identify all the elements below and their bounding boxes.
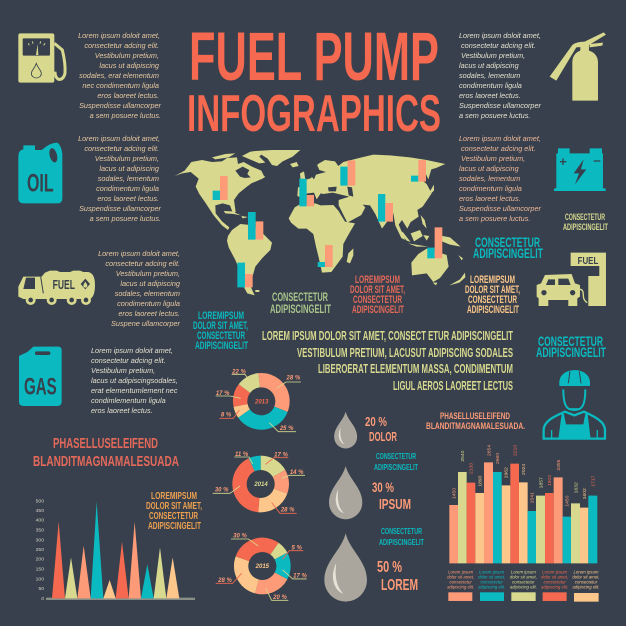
text block: gas: eros laoreet lectus. xyxy=(91,406,153,415)
percent labels: 28 % xyxy=(217,578,232,584)
percent labels: 20 % xyxy=(272,595,287,601)
text block: pump: Lorem ipsum doloit amet, xyxy=(78,31,160,40)
drop captions: CONSECTETUR xyxy=(376,451,416,461)
percent labels: 5 % xyxy=(292,545,302,551)
icon: worker xyxy=(544,370,605,439)
bar values: 1890 xyxy=(477,475,483,487)
label: red map caption: DOLOR SIT AMET, xyxy=(350,284,405,296)
inland seas xyxy=(303,165,353,203)
percent labels: 14 % xyxy=(290,470,304,476)
donut charts xyxy=(213,370,307,601)
icon: gas can: GAS xyxy=(24,373,57,400)
label: teal caption left xyxy=(193,310,248,352)
label: phasellus right: PHASELLUSELEIFEND xyxy=(440,411,510,422)
axis labels: 500 xyxy=(36,498,44,504)
legend text: adipiscing elit. xyxy=(572,584,600,589)
fuel drops xyxy=(324,412,367,602)
drop labels: LOREM xyxy=(381,577,418,594)
drop 20 xyxy=(334,412,357,448)
bar values: 1541 xyxy=(530,492,536,503)
title: INFOGRAPHICS xyxy=(187,85,441,143)
text block: truck: Lorem ipsum doloit amet, xyxy=(98,249,180,258)
drop captions xyxy=(374,451,425,547)
legend text: consectetur xyxy=(543,579,566,584)
legend swatches xyxy=(448,592,599,602)
drop labels: 20 % xyxy=(365,415,387,429)
legend text: dolor sit amet, xyxy=(447,574,474,579)
text block: gas: consectetur adcing elit. xyxy=(91,356,166,365)
drop labels: IPSUM xyxy=(379,496,411,513)
bar values: 2660 xyxy=(495,453,501,464)
text block: truck: lacus ut adipiscing xyxy=(120,279,180,288)
text block: extinguisher: condimentum ligula xyxy=(459,81,522,90)
drop captions: ADIPISCINGELIT xyxy=(374,462,419,472)
drop labels: 50 % xyxy=(377,559,402,576)
label: orange chart caption xyxy=(146,490,202,532)
bar values: 2130 xyxy=(469,463,475,474)
text block: oil: Lorem ipsum doloit amet, xyxy=(78,134,160,143)
bar values: 2355 xyxy=(556,459,562,471)
drop 30 xyxy=(329,466,362,519)
label: teal caption left: CONSECTETUR xyxy=(197,330,245,342)
legend text: adipiscing elit. xyxy=(541,584,568,589)
text block: oil: lacus ut adipiscing xyxy=(99,164,159,173)
label: phasellus left xyxy=(33,435,179,470)
percent labels: 22 % xyxy=(231,370,246,376)
text block: extinguisher: Lorem ipsum doloit amet, xyxy=(459,31,541,40)
text block: pump: Suspendisse ullamcorper xyxy=(79,101,162,110)
label: red map caption: ADIPISCINGELIT xyxy=(352,304,404,316)
bar values: 2654 xyxy=(486,445,492,456)
label: peach map caption: DOLOR SIT AMET, xyxy=(465,284,520,296)
text block: pump: consectetur adcing elit. xyxy=(84,41,159,50)
text block: gas: Vestibulum pretium, xyxy=(91,366,155,375)
text block: oil: consectetur adcing elit. xyxy=(84,144,159,153)
bar values: 2540 xyxy=(460,450,466,462)
label: teal caption upper right xyxy=(473,235,543,261)
text block: oil: condimentum ligula xyxy=(96,184,159,193)
legend text: adipiscing elit. xyxy=(478,584,505,589)
text block: truck: eros laoreet lectus. xyxy=(118,309,180,318)
label: teal caption upper right: CONSECTETUR xyxy=(475,235,540,250)
percent labels: 30 % xyxy=(215,487,229,493)
percent labels xyxy=(215,370,307,601)
text block: extinguisher: consectetur adcing elit. xyxy=(461,41,536,50)
legend text: Lorem ipsum xyxy=(448,569,474,574)
legend text: consectetur xyxy=(449,579,472,584)
americas xyxy=(175,150,300,295)
text block: pump xyxy=(78,31,162,120)
text block: pump: nec condimentum ligula xyxy=(82,81,159,90)
text block: battery: Vestibulum pretium, xyxy=(461,154,525,163)
text block: battery: consectetur adcing elit. xyxy=(461,144,536,153)
axis labels: 100 xyxy=(36,576,44,582)
text block: gas: Lorem ipsum doloit amet, xyxy=(91,346,173,355)
peak chart xyxy=(36,498,195,602)
drop captions: CONSECTETUR xyxy=(381,526,422,536)
bar values: 1717 xyxy=(591,475,597,487)
text block: pump: Vestibulum pretium, xyxy=(95,51,159,60)
legend text: Lorem ipsum xyxy=(479,569,505,574)
legend text: adipiscing elit. xyxy=(447,584,474,589)
legend text: dolor sit amet, xyxy=(510,574,537,579)
axis labels: 200 xyxy=(36,557,44,563)
percent labels: 30 % xyxy=(233,533,247,539)
text block: truck: consectetur adcing elit. xyxy=(105,259,180,268)
icon: oil can: OIL xyxy=(27,170,54,198)
year labels: 2015 xyxy=(255,564,270,570)
label: phasellus left: BLANDITMAGNAMALESUADA xyxy=(33,453,179,470)
drop labels: 30 % xyxy=(372,479,394,495)
text block: oil: a sem posuere luctus. xyxy=(90,214,161,223)
hudson bay xyxy=(235,167,251,178)
legend text: consectetur xyxy=(575,579,598,584)
label: teal caption above worker xyxy=(536,333,606,360)
bar chart xyxy=(447,445,600,602)
text block: oil xyxy=(78,134,162,223)
label: peach map caption xyxy=(465,274,520,316)
label: phasellus left: PHASELLUSELEIFEND xyxy=(53,435,158,452)
legend text: Lorem ipsum xyxy=(573,569,599,574)
icon: fuel truck: FUEL xyxy=(53,277,75,292)
axis labels: 350 xyxy=(36,528,44,534)
central text lines xyxy=(262,329,513,393)
label: red map caption: LOREMIPSUM xyxy=(355,274,400,286)
label: teal caption left: ADIPISCINGELIT xyxy=(195,340,248,352)
bar values: 1602 xyxy=(582,488,588,499)
axis labels: 300 xyxy=(36,537,44,543)
legend text: Lorem ipsum xyxy=(542,569,568,574)
text block: battery: sodales, lementum xyxy=(459,174,520,183)
text block: extinguisher: eros laoreet lectus. xyxy=(459,91,521,100)
bar values: 1857 xyxy=(538,477,544,488)
label: orange chart caption: CONSECTETUR xyxy=(149,510,198,522)
text block: extinguisher: a sem posuere luctus. xyxy=(459,111,530,120)
legend text: dolor sit amet, xyxy=(541,574,568,579)
text block: truck xyxy=(98,249,181,328)
legend text: Lorem ipsum xyxy=(511,569,536,574)
title: FUEL PUMP xyxy=(189,18,439,95)
label: red map caption: CONSECTETUR xyxy=(353,294,402,306)
map bars xyxy=(213,160,442,287)
label: peach map caption: LOREMIPSUM xyxy=(470,274,515,286)
text block: gas xyxy=(91,346,178,415)
axis labels: 0 xyxy=(41,596,44,602)
text block: truck: sodales, elementum xyxy=(115,289,180,298)
text block: gas: lacus ut adipiscingsodales, xyxy=(91,376,178,385)
percent labels: 17 % xyxy=(274,453,288,459)
bar values: 1962 xyxy=(504,467,510,478)
label: phasellus right xyxy=(426,411,525,432)
label: peach map caption: ADIPISCINGELIT xyxy=(467,304,519,316)
text block: oil: Vestibulum pretium, xyxy=(95,154,159,163)
axis labels: 150 xyxy=(36,566,44,572)
drop 50 xyxy=(324,533,367,602)
text block: extinguisher xyxy=(459,31,541,120)
bars xyxy=(449,462,597,563)
icon: gas can xyxy=(19,347,62,406)
text block: pump: a sem posuere luctus. xyxy=(90,111,161,120)
percent labels: 17 % xyxy=(216,391,230,397)
text block: truck: Suspene ullamcorper xyxy=(111,319,181,328)
year labels xyxy=(253,399,270,570)
bar values: 1902 xyxy=(547,475,553,486)
text block: extinguisher: Suspendisse ullamcorper xyxy=(459,101,541,110)
text block: battery: Suspendisse ullamcorper xyxy=(459,204,541,213)
year labels: 2013 xyxy=(254,399,269,405)
text block: pump: eros laoreet lectus. xyxy=(97,91,159,100)
legend text: consectetur xyxy=(480,579,503,584)
bar values: 1632 xyxy=(573,482,579,493)
percent labels: 17 % xyxy=(293,574,307,580)
text block: extinguisher: sodales, lementum xyxy=(459,71,520,80)
label: orange chart caption: DOLOR SIT AMET, xyxy=(146,500,202,512)
donut 2014 xyxy=(232,455,290,513)
central text lines: LIBEROERAT ELEMENTUM MASSA, CONDIMENTUM xyxy=(318,362,513,376)
bar values: 1450 xyxy=(451,488,457,499)
legend text: adipiscing elit. xyxy=(510,584,537,589)
label: green map caption: ADIPISCINGELIT xyxy=(270,304,331,316)
donut 2015 xyxy=(233,537,292,595)
legend text xyxy=(447,569,600,589)
icon: fire extinguisher xyxy=(550,32,606,101)
percent labels: 25 % xyxy=(279,426,294,432)
bar values: 2024 xyxy=(521,464,527,475)
text block: battery: lacus ut adipiscing xyxy=(459,164,519,173)
label: teal caption left: LOREMIPSUM xyxy=(198,310,244,322)
text block: truck: Vestibulum pretium, xyxy=(116,269,180,278)
label: green map caption xyxy=(270,292,331,316)
icon: car at fuel pump: FUEL xyxy=(578,256,598,267)
axis labels xyxy=(36,498,44,602)
axis labels: 250 xyxy=(36,547,44,553)
label: orange chart caption: LOREMIPSUM xyxy=(151,490,197,502)
label: green map caption: CONSECTETUR xyxy=(272,292,328,304)
icon: oil can xyxy=(18,143,62,203)
legend text: dolor sit amet, xyxy=(478,574,505,579)
central text lines: LIGUL AEROS LAOREET LECTUS xyxy=(393,379,513,393)
drop labels: DOLOR xyxy=(369,430,397,444)
text block: pump: lacus ut adipiscing xyxy=(99,61,159,70)
percent labels: 28 % xyxy=(286,376,301,382)
text block: oil: eros laoreet lectus. xyxy=(97,194,159,203)
label: teal caption upper right: ADIPISCINGELIT xyxy=(473,246,543,261)
label: red map caption xyxy=(350,274,405,316)
label: peach map caption: CONSECTETUR xyxy=(468,294,517,306)
text block: battery: condimentum ligula xyxy=(459,184,522,193)
icon: fuel truck xyxy=(18,271,95,305)
text block: battery: Lorem ipsum doloit amet, xyxy=(459,134,541,143)
drop labels xyxy=(365,415,418,594)
text block: oil: Suspendisse ullamcorper xyxy=(79,204,162,213)
year labels: 2014 xyxy=(253,482,268,488)
old world xyxy=(289,155,465,285)
bar values xyxy=(451,445,597,507)
title xyxy=(187,18,441,143)
percent labels: 11 % xyxy=(235,452,249,458)
label: orange chart caption: ADIPISCINGELIT xyxy=(148,520,201,532)
text block: gas: erat elementumlement nec xyxy=(91,386,178,395)
legend text: consectetur xyxy=(512,579,535,584)
text block: truck: condimentum ligula xyxy=(117,299,180,308)
text block: extinguisher: Vestibulum pretium, xyxy=(461,51,525,60)
percent labels: 28 % xyxy=(280,508,295,514)
icon: battery xyxy=(554,148,606,191)
drop captions: ADIPISCINGELIT xyxy=(379,537,425,547)
icon: car at fuel pump xyxy=(537,253,606,306)
percent labels: 8 % xyxy=(221,413,232,419)
text block: battery: a sem posuere luctus. xyxy=(459,214,530,223)
text block: extinguisher: lacus ut adipiscing xyxy=(459,61,519,70)
text block: pump: sodales, erat elementum xyxy=(79,71,159,80)
icon: fuel pump xyxy=(18,33,65,83)
axis labels: 50 xyxy=(38,586,44,592)
leader lines xyxy=(213,374,307,600)
bar values: 1450 xyxy=(565,495,571,507)
label: phasellus right: BLANDITMAGNAMALESUADA. xyxy=(426,421,525,432)
world map xyxy=(175,150,465,295)
donut 2013 xyxy=(232,372,291,431)
text block: gas: condimlementum ligula xyxy=(91,396,166,405)
text block: battery: eros laoreet lectus. xyxy=(459,194,521,203)
label: battery caption xyxy=(563,212,608,232)
peaks xyxy=(52,502,179,598)
axis labels: 450 xyxy=(36,508,44,514)
label: teal caption left: DOLOR SIT AMET, xyxy=(193,320,248,332)
text block: oil: sodales, lementum xyxy=(98,174,159,183)
text block: battery xyxy=(459,134,541,223)
bar values: 2210 xyxy=(512,445,518,456)
axis labels: 400 xyxy=(36,518,44,524)
legend text: dolor sit amet, xyxy=(572,574,600,579)
